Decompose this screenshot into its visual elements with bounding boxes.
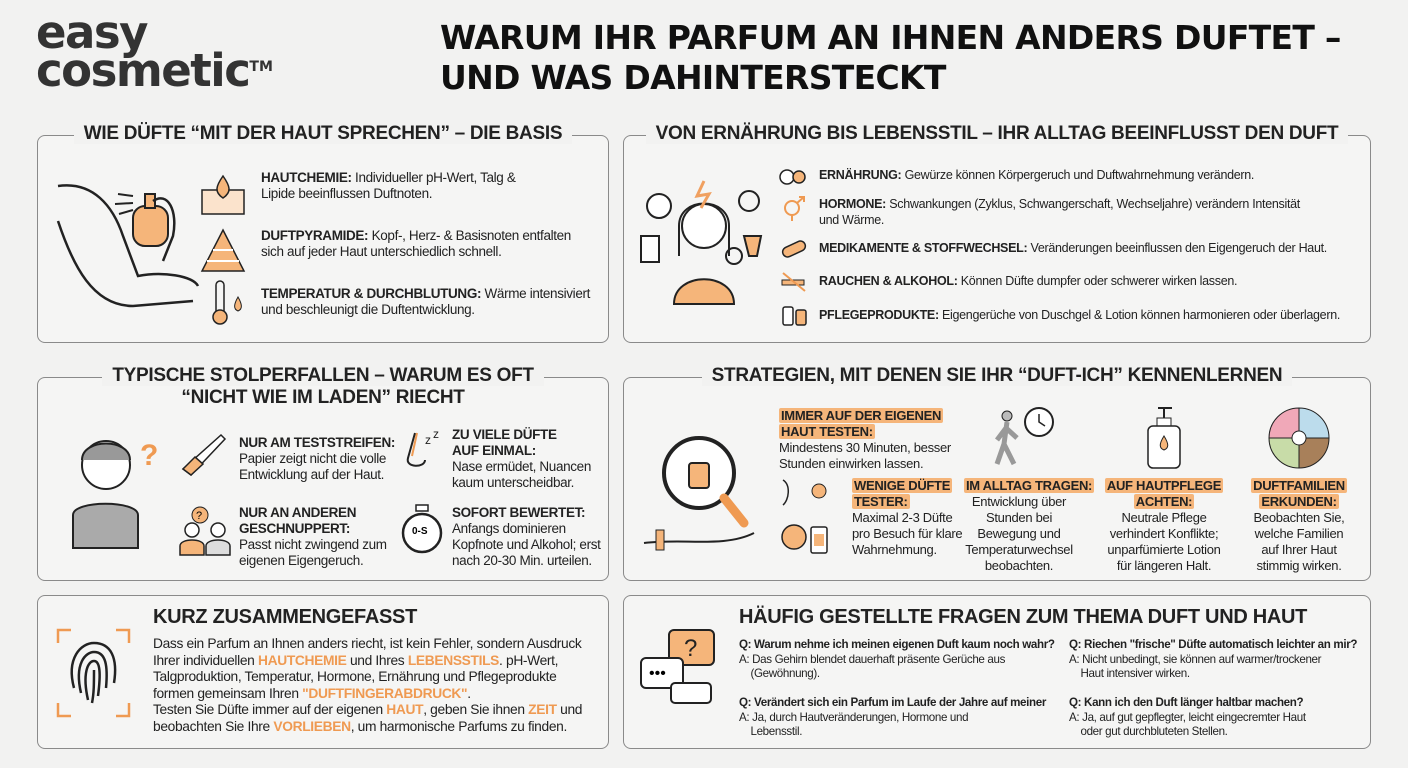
text: sofort bewertet: Anfangs dominieren [452, 521, 566, 536]
logo: cosmeticTM [36, 44, 273, 97]
text: medikamente: MEDIKAMENTE & STOFFWECHSEL: Veränderungen beeinflussen den Eigengeruch der Haut. [819, 241, 1327, 255]
icon: fragrance wheel [1267, 406, 1331, 470]
heading: stolperfallen: “NICHT WIE IM LADEN” RIECHT [181, 387, 465, 408]
text: hormone: und Wärme. [819, 213, 884, 227]
icon: two people [179, 506, 231, 556]
icon: confused person [72, 439, 158, 549]
text: wenige düfte: WENIGE DÜFTE [854, 478, 950, 493]
text: hautpflege: unparfümierte Lotion [1107, 542, 1221, 557]
text: eigene haut: Stunden einwirken lassen. [779, 456, 923, 471]
text: faq left: Q: Verändert sich ein Parfum im Laufe der Jahre auf meiner [739, 696, 1046, 709]
icon: tired nose [406, 427, 439, 467]
icon: pyramid [200, 228, 246, 272]
panel: strategien [623, 377, 1371, 581]
text: zu viele düfte: kaum unterscheidbar. [452, 475, 574, 490]
text: faq right: A: Nicht unbedingt, sie können auf warmer/trockener [1069, 652, 1321, 666]
text: faq left: A: Ja, durch Hautveränderungen, Hormone und [739, 710, 968, 724]
panel: zusammengefasst [37, 595, 609, 749]
icon: arm spraying perfume [56, 184, 199, 308]
heading: basis: WIE DÜFTE “MIT DER HAUT SPRECHEN” – DIE BASIS [84, 123, 562, 144]
icon: chat bubbles: ••• [649, 665, 666, 682]
text: faq right: Q: Riechen "frische" Düfte automatisch leichter an mir? [1069, 638, 1357, 651]
icon: lotion bottle [1144, 406, 1184, 471]
list: lebensstil factors [779, 168, 1340, 326]
text: hautpflege: für längeren Halt. [1117, 558, 1211, 573]
icon: tired nose: z [425, 433, 431, 447]
heading: lebensstil: VON ERNÄHRUNG BIS LEBENSSTIL – IHR ALLTAG BEEINFLUSST DEN DUFT [656, 123, 1338, 144]
text: summary: Testen Sie Düfte immer auf der eigenen HAUT, geben Sie ihnen ZEIT und [153, 702, 582, 717]
icon: walking with clock [994, 407, 1054, 465]
text: duftfamilien: stimmig wirken. [1256, 558, 1342, 573]
text: anderen geschnuppert: Passt nicht zwingend zum [239, 537, 387, 552]
icon: gender [784, 196, 805, 221]
text: temperatur: TEMPERATUR & DURCHBLUTUNG: Wärme intensiviert [261, 286, 590, 301]
text: hautchemie [261, 170, 516, 201]
text: anderen geschnuppert [239, 505, 387, 568]
text: summary: formen gemeinsam Ihren "DUFTFINGERABDRUCK". [153, 686, 471, 700]
text: temperatur: und beschleunigt die Duftentwicklung. [261, 302, 475, 317]
text: summary: Ihrer individuellen HAUTCHEMIE und Ihres LEBENSSTILS. pH-Wert, [153, 652, 558, 668]
title [440, 18, 1341, 97]
text: faq left: Lebensstil. [750, 725, 802, 738]
title: UND WAS DAHINTERSTECKT [440, 58, 946, 97]
text: im alltag: IM ALLTAG TRAGEN: [966, 478, 1092, 493]
text: eigene haut: Mindestens 30 Minuten, besser [779, 440, 951, 455]
text: faq right: A: Ja, auf gut gepflegter, leicht eingecremter Haut [1069, 710, 1306, 724]
icon: garlic [779, 169, 806, 185]
text: duftpyramide: DUFTPYRAMIDE: Kopf-, Herz- & Basisnoten entfalten [261, 228, 571, 243]
text: teststreifen [239, 435, 395, 482]
text: teststreifen: Entwicklung auf der Haut. [239, 467, 384, 482]
text: zu viele düfte [452, 427, 591, 490]
text: sofort bewertet: SOFORT BEWERTET: [452, 505, 585, 520]
icon: woman with influences [640, 180, 762, 305]
text: anderen geschnuppert: GESCHNUPPERT: [239, 521, 350, 536]
icon: tester sniff and bottles [781, 479, 828, 554]
text: faq right: Haut intensiver wirken. [1080, 667, 1190, 680]
text: duftfamilien [1244, 478, 1354, 574]
text: zu viele düfte: Nase ermüdet, Nuancen [452, 459, 591, 474]
title: WARUM IHR PARFUM AN IHNEN ANDERS DUFTET – [440, 18, 1341, 57]
text: hautpflege: verhindert Konflikte; [1110, 526, 1218, 541]
text: wenige düfte: Wahrnehmung. [852, 542, 937, 557]
text: duftfamilien: Beobachten Sie, [1254, 510, 1344, 525]
text: faq left [739, 638, 1055, 740]
heading: strategien: STRATEGIEN, MIT DENEN SIE IHR “DUFT-ICH” KENNENLERNEN [712, 365, 1282, 386]
text: duftfamilien: DUFTFAMILIEN [1253, 478, 1345, 493]
text: hautchemie: Lipide beeinflussen Duftnoten. [261, 186, 432, 201]
text: im alltag: Temperaturwechsel [965, 542, 1073, 557]
heading: stolperfallen [102, 365, 544, 408]
text: zu viele düfte: AUF EINMAL: [452, 443, 536, 458]
text: im alltag [964, 478, 1094, 573]
icon: two people: ? [196, 510, 202, 522]
text: summary: Talgproduktion, Temperatur, Hormone, Ernährung und Pflegeprodukte [153, 669, 556, 684]
icon: stopwatch: 0-S [412, 526, 428, 537]
logo [36, 6, 273, 97]
icon: bottles [782, 306, 807, 326]
icon: chat bubbles: ? [684, 635, 697, 662]
text: wenige düfte: Maximal 2-3 Düfte [852, 510, 952, 525]
text: wenige düfte [852, 478, 962, 557]
text: ernährung: ERNÄHRUNG: Gewürze können Körpergeruch und Duftwahrnehmung verändern. [819, 168, 1254, 182]
panel: stolperfallen [37, 377, 609, 581]
panel: basis [37, 135, 609, 343]
text: hautpflege [1104, 478, 1224, 574]
panel: lebensstil [623, 135, 1371, 343]
text: rauchen: RAUCHEN & ALKOHOL: Können Düfte dumpfer oder schwerer wirken lassen. [819, 274, 1237, 288]
text: hautchemie: HAUTCHEMIE: Individueller pH-Wert, Talg & [261, 170, 515, 185]
icon: stopwatch [402, 504, 442, 554]
text: wenige düfte: pro Besuch für klare [852, 526, 962, 541]
text: wenige düfte: TESTER: [854, 494, 908, 509]
text: sofort bewertet: nach 20-30 Min. urteilen. [452, 553, 592, 568]
icon: skin drop [201, 174, 245, 215]
icon: fingerprint [56, 628, 131, 718]
panel: faq [623, 595, 1371, 749]
text: eigene haut: IMMER AUF DER EIGENEN [781, 408, 941, 423]
text: faq right: oder gut durchbluteten Stellen. [1080, 725, 1228, 738]
text: hautpflege: Neutrale Pflege [1121, 510, 1207, 525]
icon: magnifier with perfume [644, 436, 754, 550]
text: im alltag: Stunden bei [986, 510, 1052, 525]
text: faq right [1069, 638, 1357, 740]
text: sofort bewertet [452, 505, 601, 568]
text: hormone: HORMONE: Schwankungen (Zyklus, Schwangerschaft, Wechseljahre) verändern Intensität [819, 197, 1300, 211]
icon: chat bubbles [639, 628, 719, 708]
heading: stolperfallen: TYPISCHE STOLPERFALLEN – WARUM ES OFT [112, 365, 534, 386]
text: duftfamilien: welche Familien [1255, 526, 1343, 541]
icon: pill [782, 240, 806, 258]
text: im alltag: Bewegung und [977, 526, 1061, 541]
icon: test strip [182, 434, 226, 476]
text: faq right: Q: Kann ich den Duft länger haltbar machen? [1069, 696, 1303, 709]
heading: kurz zusammengefasst: KURZ ZUSAMMENGEFASST [153, 606, 417, 628]
text: pflegeprodukte: PFLEGEPRODUKTE: Eigengerüche von Duschgel & Lotion können harmonieren oder überlagern. [819, 308, 1340, 322]
text: summary: beobachten Sie Ihre VORLIEBEN, um harmonische Parfums zu finden. [153, 718, 567, 734]
icon: thermometer [212, 280, 242, 325]
text: temperatur [261, 286, 590, 317]
icon: tired nose: z [433, 427, 439, 441]
text: im alltag: Entwicklung über [972, 494, 1066, 509]
text: duftpyramide: sich auf jeder Haut unterschiedlich schnell. [261, 244, 502, 259]
text: hormone [819, 197, 1300, 227]
text: teststreifen: NUR AM TESTSTREIFEN: [239, 435, 395, 450]
text: summary [153, 636, 582, 735]
text: faq left: A: Das Gehirn blendet dauerhaft präsente Gerüche aus [739, 652, 1005, 666]
text: anderen geschnuppert: eigenen Eigengeruch. [239, 553, 363, 568]
text: duftfamilien: auf Ihrer Haut [1261, 542, 1337, 557]
text: summary: Dass ein Parfum an Ihnen anders riecht, ist kein Fehler, sondern Ausdruck [153, 636, 581, 651]
text: eigene haut: HAUT TESTEN: [781, 424, 873, 439]
icon: confused person: ? [140, 439, 158, 472]
text: faq left: (Gewöhnung). [750, 667, 820, 680]
text: im alltag: beobachten. [985, 558, 1053, 573]
text: duftpyramide [261, 228, 571, 259]
text: duftfamilien: ERKUNDEN: [1261, 494, 1337, 509]
text: anderen geschnuppert: NUR AN ANDEREN [239, 505, 356, 520]
heading: faq: HÄUFIG GESTELLTE FRAGEN ZUM THEMA DUFT UND HAUT [739, 606, 1307, 628]
logo: easy [36, 6, 147, 59]
icon: no smoking [782, 272, 806, 292]
text: sofort bewertet: Kopfnote und Alkohol; erst [452, 537, 601, 552]
text: teststreifen: Papier zeigt nicht die volle [239, 451, 386, 466]
text: faq left: Q: Warum nehme ich meinen eigenen Duft kaum noch wahr? [739, 638, 1055, 651]
text: zu viele düfte: ZU VIELE DÜFTE [452, 427, 557, 442]
text: hautpflege: AUF HAUTPFLEGE [1107, 478, 1221, 493]
text: hautpflege: ACHTEN: [1136, 494, 1192, 509]
text: eigene haut [779, 408, 951, 471]
